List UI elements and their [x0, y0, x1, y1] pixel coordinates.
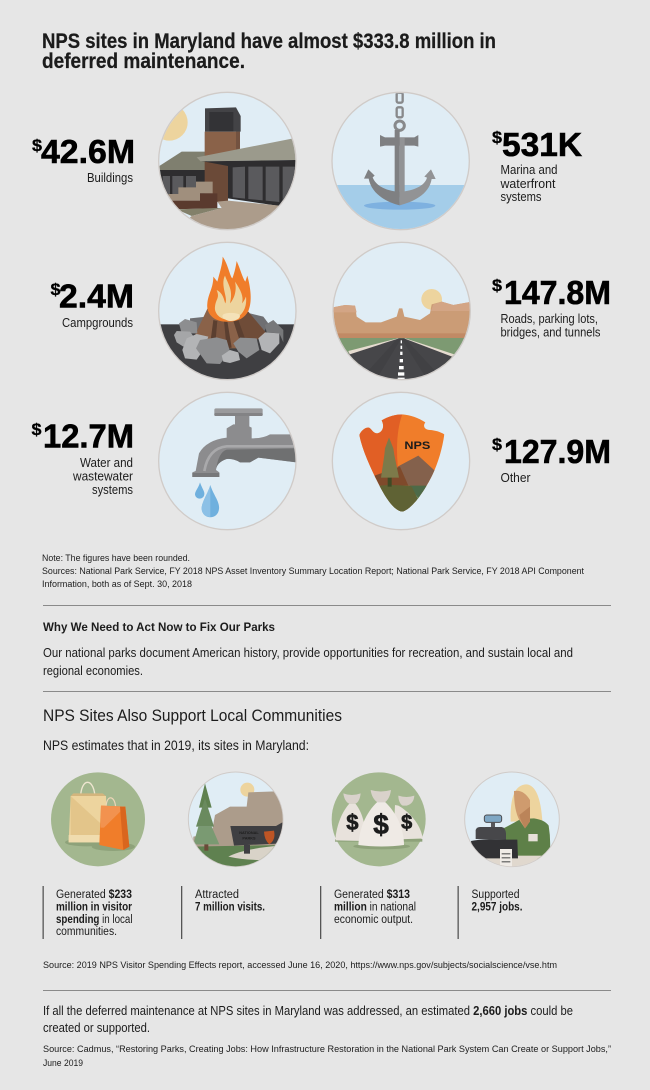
stat: roads: $	[492, 276, 503, 295]
stat: visits: Attracted	[195, 889, 239, 901]
stat: visitor spending: Generated $233	[56, 889, 132, 901]
stat: campgrounds: Campgrounds	[62, 316, 133, 330]
stat: marina: waterfront	[500, 177, 556, 191]
icon: arrowhead: NPS	[404, 440, 430, 452]
icon: park sign: PARKS	[242, 836, 256, 840]
stat: buildings: $	[32, 136, 43, 155]
source: cadmus	[43, 1044, 611, 1069]
stat: visitor spending: million in visitor	[56, 902, 132, 914]
stat: visits: 7 million visits.	[195, 902, 265, 914]
stat: water: Water and	[80, 456, 133, 470]
stat: roads: bridges, and tunnels	[500, 326, 600, 340]
source: cadmus: June 2019	[43, 1058, 83, 1069]
stat: marina	[492, 126, 582, 204]
stat: other: 127.9M	[504, 433, 611, 470]
stat: water	[32, 418, 134, 497]
stat: visitor spending: spending in local	[56, 914, 132, 926]
stat: economic output: million in national	[334, 902, 416, 914]
heading: local communities: NPS Sites Also Support Local Communities	[43, 706, 342, 725]
icon: road	[332, 242, 472, 385]
icon: money bags: $	[373, 809, 389, 840]
stat: jobs: 2,957 jobs.	[472, 902, 522, 914]
section: why we need to act	[43, 622, 573, 678]
stat: economic output: economic output.	[334, 914, 413, 926]
notes and sources: Note: The figures have been rounded.	[42, 553, 190, 564]
stat: marina: 531K	[502, 126, 582, 163]
section: why we need to act: Why We Need to Act Now to Fix Our Parks	[43, 622, 275, 634]
source: visitor spending: Source: 2019 NPS Visitor Spending Effects report, accessed June 16, 2020, https://www.nps.gov/subjects/socialscience/vse.htm	[43, 960, 557, 971]
stat: campgrounds	[50, 278, 134, 330]
icon: money bags: $	[401, 812, 412, 834]
stat: jobs: Supported	[472, 889, 520, 901]
stat: economic output: Generated $313	[334, 889, 410, 901]
stat: other: $	[492, 435, 503, 454]
notes and sources: Information, both as of Sept. 30, 2018	[42, 579, 192, 590]
stat: marina: systems	[500, 190, 542, 204]
stat: roads: Roads, parking lots,	[500, 312, 598, 326]
stat: visitor spending	[42, 886, 132, 939]
source: cadmus: Source: Cadmus, “Restoring Parks, Creating Jobs: How Infrastructure Restoration in the National Park System Can Create or Support Jobs,”	[43, 1044, 611, 1055]
stat: buildings	[32, 133, 135, 185]
stat: visitor spending: communities.	[56, 926, 117, 938]
stat: water: systems	[92, 483, 133, 497]
stat: other	[492, 433, 611, 485]
stat: other: Other	[500, 471, 530, 485]
stat: water: $	[32, 420, 42, 439]
icon: money bags: $	[346, 810, 358, 835]
stat: economic output	[320, 886, 416, 939]
icon: arrowhead	[332, 392, 470, 530]
closing statement: If all the deferred maintenance at NPS sites in Maryland was addressed, an estimated 2,660 jobs could be	[43, 1004, 573, 1018]
icon: faucet	[159, 392, 297, 530]
icon: anchor	[325, 92, 478, 232]
icon: campfire	[157, 242, 300, 384]
title: NPS sites in Maryland have almost $333.8 million in	[42, 30, 496, 53]
stat: buildings: 42.6M	[41, 133, 135, 170]
stat: jobs	[458, 886, 522, 939]
stat: water: 12.7M	[43, 418, 134, 454]
stat: roads	[492, 274, 611, 340]
stat: campgrounds: $	[50, 280, 61, 299]
section: why we need to act: Our national parks document American history, provide opportunities for recreation, and sustain local and	[43, 646, 573, 660]
section: why we need to act: regional economies.	[43, 664, 143, 678]
icon: money bags	[332, 772, 426, 866]
icon: park sign: NATIONAL	[239, 831, 259, 835]
stat: marina: Marina and	[500, 163, 558, 177]
closing statement: created or supported.	[43, 1021, 150, 1035]
notes and sources: Sources: National Park Service, FY 2018 NPS Asset Inventory Summary Location Report; National Park Service, FY 2018 API Component	[42, 566, 584, 577]
stat: marina: $	[492, 128, 503, 147]
notes and sources	[42, 553, 584, 590]
stat: buildings: Buildings	[87, 171, 133, 185]
title: deferred maintenance.	[42, 50, 245, 73]
stat: water: wastewater	[72, 470, 133, 484]
icon: park sign	[187, 772, 287, 868]
icon: shopping bags	[51, 772, 145, 866]
closing statement	[43, 1004, 573, 1035]
subheading: NPS estimates that in 2019, its sites in Maryland:	[43, 737, 309, 753]
icon: cashier	[465, 772, 560, 869]
stat: campgrounds: 2.4M	[59, 278, 134, 314]
stat: roads: 147.8M	[504, 274, 611, 311]
title	[42, 30, 496, 73]
stat: visits	[181, 886, 265, 939]
icon: building	[151, 92, 297, 233]
